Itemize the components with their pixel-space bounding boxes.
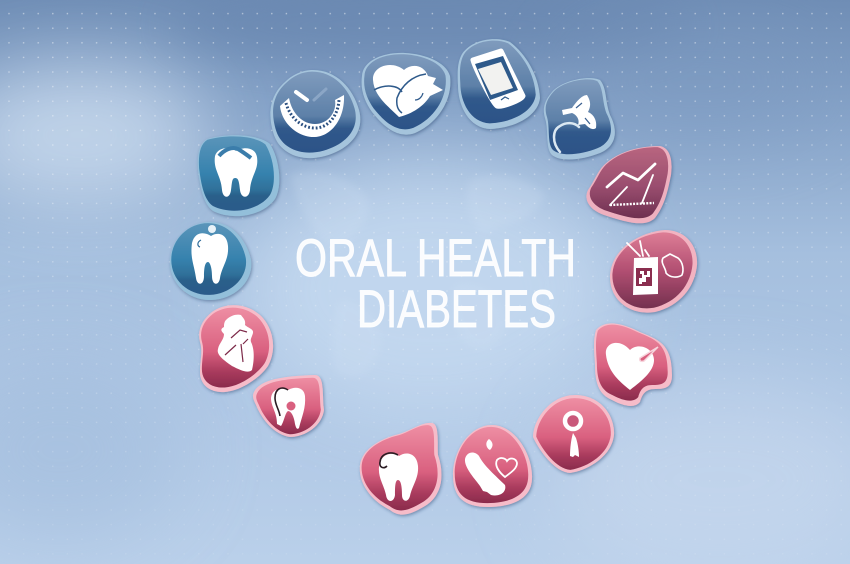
- badge: feather and heart: [453, 425, 532, 507]
- faint world map: [290, 172, 545, 377]
- badge: tooth cross-section: [253, 375, 324, 437]
- badge: rising chart: [586, 146, 672, 223]
- title: oral health diabetes: [295, 229, 576, 339]
- badge: nerve curve: [544, 78, 615, 159]
- title: oral health diabetes: DIABETES: [357, 280, 556, 339]
- badge: tooth with decay: [360, 423, 442, 515]
- badge: heart and organ: [362, 53, 450, 135]
- badge: heart with needle: [594, 323, 672, 406]
- badge: tooth with plaque: [170, 222, 251, 300]
- badge: glucose meter: [458, 39, 540, 129]
- badge: gum and teeth: [270, 70, 360, 158]
- badge: ring and figure: [533, 395, 614, 473]
- title: oral health diabetes: ORAL HEALTH: [295, 229, 576, 288]
- badge: medication pack and hand: [610, 230, 697, 313]
- badge: anatomical heart: [199, 305, 273, 392]
- badge: tooth with cavity: [198, 135, 279, 216]
